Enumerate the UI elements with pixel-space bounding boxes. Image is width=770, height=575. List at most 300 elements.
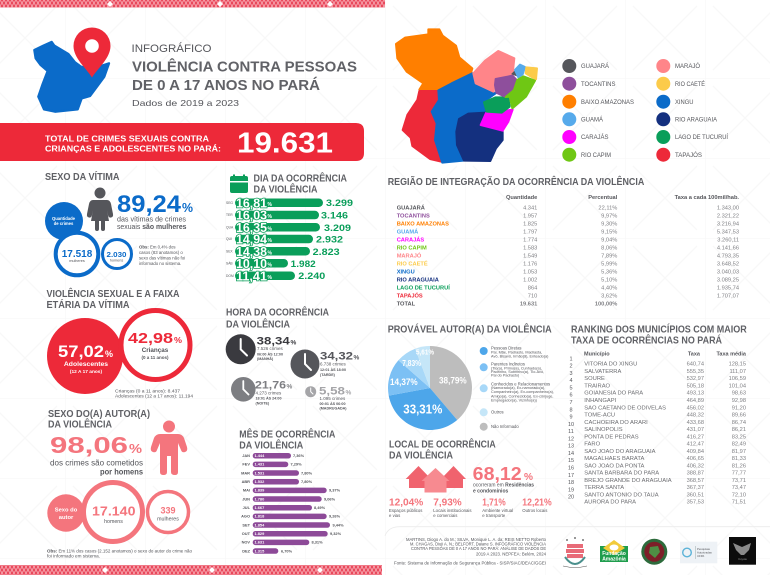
heading: provável autor: PROVÁVEL AUTOR(A) DA VIOLÊNCIA (388, 322, 552, 335)
table: percentual: 5,10% (601, 278, 617, 284)
rank numbers: 16 (568, 466, 574, 472)
table: percentual: 7,89% (601, 254, 617, 260)
table: municípios: FARO (584, 442, 601, 448)
table: taxa: 1.707,07 (717, 294, 739, 300)
table: municípios: SAO CAETANO DE ODIVELAS (584, 405, 666, 411)
map: regiões de integração do Pará (396, 29, 537, 163)
note: observação sobre sexo do autor (47, 549, 193, 559)
rank numbers: 5 (569, 385, 573, 391)
stat: 68,12% (473, 463, 534, 494)
table: quantidade: 864 (528, 286, 537, 292)
table: percentual: 22,11% (598, 205, 617, 211)
legend: regiões: MARAJÓ (675, 63, 700, 70)
table: taxa por município: 368,57 (687, 478, 704, 484)
bar chart: meses: 9,32% (330, 531, 342, 536)
table: taxa por município (687, 362, 704, 506)
bar chart: dias da semana: 10,10 (236, 256, 267, 271)
bar chart: dias da semana: 14,94 (236, 232, 268, 247)
pie chart: autores: 7,83% (402, 359, 421, 368)
table: taxa: 3.216,94 (717, 221, 739, 227)
legend: autores: Pai, Mãe, Padrasto, Madrasta, (491, 351, 542, 355)
table: taxa média por município: 92,98 (732, 398, 746, 404)
table: municípios: TRAIRAO (584, 384, 611, 390)
table: percentual: 9,30% (601, 221, 617, 227)
bar chart: meses: JUL (243, 505, 251, 510)
circle: crianças 42,98%: Crianças (142, 347, 169, 354)
rank numbers: 17 (568, 473, 574, 479)
table: taxa por município: 555,35 (687, 369, 704, 375)
table: taxa por município: 357,53 (687, 500, 704, 506)
bottom decorative band (0, 565, 382, 575)
stat: locais institucionais (433, 497, 472, 518)
legend: regiões: RIO CAETÉ (675, 81, 705, 88)
table: taxa média por município: 98,63 (732, 391, 746, 397)
logo: black square with owl wings: Coyote (738, 557, 747, 561)
bar chart: dias da semana: 2.932 (316, 234, 343, 246)
legend: autores: Parentes Indiretos (491, 362, 525, 367)
circle: quantidade de crimes: Quantidade (52, 216, 76, 221)
bar chart: dias da semana: QUA (226, 226, 234, 230)
stat: ambiente virtual (482, 497, 513, 518)
heading: ranking: RANKING DOS MUNICÍPIOS COM MAIOR (571, 323, 747, 336)
pie chart: autores: 5,61% (416, 349, 435, 356)
circle: quantidade de crimes (45, 202, 83, 240)
rank numbers (568, 356, 574, 501)
table: taxa média por município: 81,33 (732, 456, 746, 462)
heading: sexo da vítima: SEXO DA VÍTIMA (45, 170, 120, 183)
heading: dia da ocorrência: DIA DA OCORRÊNCIA (254, 172, 347, 185)
table: municípios: GOIANESIA DO PARA (584, 391, 643, 397)
table: taxa por município: 406,65 (687, 456, 704, 462)
bar chart: dias da semana: % (268, 275, 272, 281)
table: taxa: 2.321,22 (717, 213, 739, 219)
bar chart: meses: MAR (241, 470, 250, 475)
citation: M. CHAGAS, Diuji A. N.; BELFORT, Daiane S. INFOGRÁFICO VIOLÊNCIA (410, 542, 546, 547)
table: percentual: 9,97% (601, 213, 617, 219)
clock: manhã 38,34%: 38,34 (257, 335, 291, 347)
logo: black square with owl wings (729, 537, 756, 565)
table: municípios: TERRA SANTA (584, 485, 624, 491)
pie chart: autores: 38,79% (439, 375, 467, 385)
legend: regiões: XINGU (675, 99, 694, 106)
clock: noite 21,76%: 18:01 ÀS 24:00 (256, 395, 282, 400)
panel: provável autor(a) (388, 322, 554, 431)
bar chart: meses: 1.444 (254, 453, 265, 458)
rank numbers: 14 (568, 451, 574, 457)
table: taxa por município: 493,13 (687, 391, 704, 397)
circle: 17.140 homens (84, 482, 142, 542)
bar chart: meses: 1.780 (254, 496, 264, 501)
bar chart: meses: FEV (242, 462, 250, 467)
table: percentual: 100,00% (595, 302, 617, 308)
bar chart: dias da semana: 11,41 (236, 268, 267, 283)
citation: MARTINS, Diogo A. do M.; SILVA, Monique L. A. da; REIS NETTO Roberto (406, 537, 547, 542)
bar chart: dias da semana: 16,81 (236, 196, 267, 210)
heading: mês da ocorrência: MÊS DE OCORRÊNCIA (239, 427, 335, 440)
heading: mês da ocorrência (239, 427, 335, 451)
table: taxa média por município: 86,21 (732, 427, 746, 433)
heading: local de ocorrência: LOCAL DE OCORRÊNCIA (389, 438, 496, 451)
circle: 17.140 homens: homens (104, 519, 123, 525)
heading: local de ocorrência: DA VIOLÊNCIA (389, 448, 453, 461)
heading: mês da ocorrência: DA VIOLÊNCIA (239, 438, 303, 451)
table: taxa média por município: 106,59 (729, 376, 746, 382)
icon: calendar (230, 174, 248, 193)
stat: 89,24% (117, 191, 193, 231)
logo: Fundação Amazônia (600, 540, 628, 562)
table: quantidade: 1.002 (523, 278, 537, 284)
table: taxa por município: 431,07 (687, 427, 704, 433)
legend: autores: Pessoas Diretas (491, 346, 522, 351)
table: taxa: 3.040,03 (717, 270, 739, 276)
clock: tarde 34,32% (290, 350, 360, 378)
note: totais por faixa etária: Adolescentes (12 a 17 anos): 11.194 (115, 394, 194, 398)
legend: autores: Padrinho, Sobrinho(a), Tio-Avô, (491, 370, 544, 374)
table: taxa: 3.260,11 (717, 237, 739, 243)
table header: Taxa a cada 100mil/hab. (675, 195, 739, 201)
circle: adolescentes 57,02%: Adolescentes (64, 361, 108, 368)
clock: noite 21,76%: 21,76 (255, 379, 286, 391)
citation: 2019 A 2023. NEPFEA: Belém, 2024 (476, 551, 547, 556)
table: taxa por município: 360,51 (687, 492, 704, 498)
table: municípios: SOURE (584, 376, 605, 382)
bar chart: dias da semana: % (268, 214, 272, 220)
table: quantidade: 1.549 (523, 254, 537, 260)
stat: 98,06%: por homens (100, 468, 144, 476)
circle: crianças 42,98%: 42,98 (128, 331, 173, 347)
bar chart: dias da semana: 3.209 (324, 223, 351, 234)
clock: noite 21,76%: % (286, 383, 292, 390)
stat: 98,06% (50, 432, 144, 476)
legend: regiões: BAIXO AMAZONAS (581, 99, 634, 106)
citation: CONTRA PESSOAS DE 0 A 17 ANOS NO PARÁ: ANÁLISE DE DADOS DE (411, 546, 546, 551)
legend: autores: Pai do Padrasto) (491, 374, 520, 378)
table: taxa média por município: 81,26 (732, 463, 746, 469)
legend: regiões: TOCANTINS (581, 81, 616, 88)
table: taxa por município: 388,87 (687, 471, 704, 477)
table: taxa por município: 505,18 (687, 384, 704, 390)
rank numbers: 8 (569, 407, 573, 413)
bar chart: meses: 1.531 (254, 470, 265, 475)
bar chart: meses: 8,31% (312, 540, 323, 545)
legend: regiões (562, 59, 728, 162)
rank numbers: 18 (568, 480, 574, 486)
bar chart: dias da semana: % (268, 262, 272, 268)
panel: sexo do(a) autor(a) (47, 409, 193, 559)
table: quantidade: 1.797 (523, 229, 537, 235)
table: taxa média por município: 111,07 (729, 369, 746, 375)
legend: regiões: TAPAJÓS (675, 152, 702, 159)
table: nomes das regiões: GUAMÁ (397, 228, 418, 235)
circle: crianças 42,98%: % (174, 336, 182, 345)
rank numbers: 11 (568, 429, 574, 435)
bar chart: meses: 1.315 (254, 548, 265, 553)
table: taxa média por município: 91,20 (732, 405, 746, 411)
heading: hora da ocorrência: DA VIOLÊNCIA (226, 317, 290, 330)
panel: dia da ocorrência (226, 172, 353, 283)
clock: manhã 38,34%: 06:00 ÀS 12:00 (257, 352, 283, 357)
table: taxa média por município: 82,49 (732, 442, 746, 448)
stat: outros locais (522, 497, 552, 513)
table header: ranking: Taxa (688, 351, 701, 357)
table: taxa por município: 448,32 (687, 412, 704, 418)
circle: quantidade de crimes: de crimes (54, 221, 74, 226)
clock: tarde 34,32%: % (354, 354, 360, 361)
table: quantidade: 1.825 (523, 221, 537, 227)
legend: autores: (Tio(a), Primo(a), Cunhado(a), (491, 366, 542, 370)
note: observação sobre sexo da vítima: casos (83 anotamos) o (139, 250, 183, 255)
heading: faixa etária (46, 287, 180, 311)
table: taxa média por município: 71,51 (732, 500, 746, 506)
table: taxa por município: 409,84 (687, 449, 704, 455)
table: nomes das regiões: GUAJARÁ (397, 204, 425, 211)
table: municípios: CACHOEIRA DO ARARI (584, 420, 648, 426)
table: nomes das regiões: TAPAJÓS (397, 292, 423, 300)
bar chart: dias da semana: SEG (226, 201, 233, 205)
circle: adolescentes 57,02%: 57,02 (58, 342, 104, 361)
table: taxa por município: 416,27 (687, 434, 704, 440)
table: municípios: SALVATERRA (584, 369, 621, 375)
table: percentual: 3,62% (601, 294, 617, 300)
rank numbers: 2 (569, 364, 573, 370)
heading: dia da ocorrência (254, 172, 347, 196)
legend: autores (480, 346, 554, 431)
rank numbers: 13 (568, 444, 574, 450)
heading: sexo do autor (48, 409, 150, 430)
table: municípios: SAO JOAO DA PONTA (584, 463, 645, 469)
bar chart: dias da semana (226, 196, 353, 283)
table: taxa média por município: 128,15 (729, 362, 746, 368)
table: municípios: SANTO ANTONIO DO TAUA (584, 492, 659, 498)
bar chart: meses: AGO (241, 514, 250, 519)
circle: 17.140 homens: 17.140 (92, 504, 136, 518)
heading: hora da ocorrência (226, 306, 329, 330)
note: observação sobre sexo do autor: foi informado em sistema. (47, 554, 100, 559)
table: quantidade (520, 205, 537, 308)
table: quantidade: 1.053 (523, 270, 537, 276)
clock: madrugada 5,58%: 1.095 crimes (320, 396, 346, 401)
table: municípios: SALINOPOLIS (584, 427, 623, 433)
stat: outros locais: 12,21% (522, 497, 552, 508)
title block: INFOGRÁFICO (132, 42, 212, 55)
panel: mês da ocorrência (239, 427, 344, 554)
rank numbers: 4 (569, 378, 573, 384)
table header (506, 195, 739, 201)
table: municípios: MAGALHAES BARATA (584, 456, 644, 462)
stat: 89,24%: % (182, 200, 193, 215)
table: taxa: 5.347,53 (717, 229, 739, 235)
banner: total de crimes sexuais (0, 123, 364, 161)
citation (394, 537, 547, 565)
stat: ambiente virtual: 1,71% (482, 497, 506, 508)
bar chart: dias da semana: SÁB (226, 262, 233, 266)
logo: circular seal (641, 539, 667, 565)
table: percentual: 8,06% (601, 246, 617, 252)
logo: Fundação Amazônia: Amazônia (602, 556, 626, 562)
note: observação sobre sexo da vítima: Obs: Em 0,4% dos (139, 244, 176, 250)
panel: hora da ocorrência (226, 306, 360, 410)
bar chart: meses: DEZ (242, 548, 251, 553)
bar chart: meses: 7,80% (301, 470, 313, 475)
bar chart: meses: 1.818 (254, 514, 265, 519)
rank numbers: 3 (569, 371, 573, 377)
title block: DE 0 A 17 ANOS NO PARÁ (132, 77, 320, 94)
stat: 68,12%: ocorreram em Residências (473, 483, 534, 489)
stat: 98,06%: % (129, 441, 142, 456)
stat: 89,24%: sexuais são mulheres (117, 222, 186, 231)
legend: autores: Não Informado (491, 424, 519, 429)
bar chart: meses (241, 453, 344, 554)
stat: locais institucionais: 7,93% (433, 497, 462, 508)
table: quantidade: 1.176 (523, 262, 537, 268)
bar chart: meses: MAI (243, 488, 250, 493)
pie chart: autores: 33,31% (403, 402, 443, 417)
bar chart: meses: 1.829 (254, 531, 265, 536)
circle: 2.030 homens: homens (110, 258, 123, 262)
bar chart: meses: 9,06% (324, 496, 336, 501)
legend: autores: Conhecidos e Relacionamentos (491, 381, 550, 386)
circle: 339 mulheres: mulheres (157, 516, 179, 522)
table header: ranking: Taxa média (716, 351, 747, 357)
table: quantidade: 19.631 (520, 302, 537, 308)
table: nomes das regiões: RIO ARAGUAIA (397, 278, 439, 284)
circle: 2.030 homens: 2.030 (106, 250, 126, 259)
circle: sexo do autor (47, 494, 85, 532)
bar chart: dias da semana: QUI (226, 237, 232, 241)
bar chart: meses: NOV (242, 540, 250, 545)
table: nomes das regiões (397, 204, 450, 308)
panel: sexo da vítima (45, 170, 193, 275)
table: taxa por município: 532,97 (687, 376, 704, 382)
icon: female figure (87, 188, 113, 231)
stat: ambiente virtual: Ambiente virtual (482, 508, 513, 513)
bar chart: meses: 7,36% (293, 453, 305, 458)
table: nomes das regiões: XINGU (397, 270, 415, 276)
bar chart: meses: 6,70% (281, 548, 293, 553)
bar chart: dias da semana: DOM (226, 274, 234, 278)
heading: sexo do autor: DA VIOLÊNCIA (48, 418, 112, 430)
bar chart: dias da semana: SEX (226, 250, 233, 254)
clock: manhã 38,34% (226, 334, 296, 364)
rank numbers: 19 (568, 487, 574, 493)
bar chart: meses: 9,37% (329, 488, 341, 493)
table: municípios: INHANGAPI (584, 398, 617, 404)
table header: Percentual (588, 195, 618, 201)
heading: ranking (571, 323, 747, 347)
legend: autores: Outros (491, 410, 504, 414)
legend: regiões: CARAJÁS (581, 134, 608, 141)
table: taxa: 3.089,25 (717, 278, 739, 284)
table: taxa média por município: 89,66 (732, 412, 746, 418)
icon: houses (406, 466, 466, 492)
bar chart: dias da semana: % (268, 202, 272, 208)
table: taxa por município: 456,02 (687, 405, 704, 411)
legend: autores: Avô, Bisavô, Irmão(ã), Enteado(a) (491, 354, 549, 358)
legend: regiões: RIO CAPIM (581, 152, 611, 159)
bar chart: meses: OUT (242, 531, 251, 536)
logo: Pesquisas Autorizadas: Pesquisas (697, 547, 711, 551)
stat: locais institucionais: e comerciais (433, 513, 457, 518)
bar chart: meses: 7,29% (290, 462, 302, 467)
panel: região de integração (388, 175, 739, 308)
bar chart: dias da semana: 2.240 (298, 271, 325, 282)
bar chart: meses: JAN (242, 453, 250, 458)
table: quantidade: 1.957 (523, 213, 537, 219)
table header: ranking: Município (584, 351, 610, 357)
clock: madrugada 5,58%: (MADRUGADA) (320, 406, 347, 410)
bar chart: dias da semana: 1.982 (291, 259, 316, 270)
table: nomes das regiões: RIO CAETÉ (397, 260, 428, 268)
rank numbers: 10 (568, 422, 574, 428)
heading: local de ocorrência (389, 438, 496, 461)
table: taxa média por município: 83,25 (732, 434, 746, 440)
bar chart: dias da semana: 16,03 (236, 208, 267, 223)
table: percentual: 9,04% (601, 237, 617, 243)
table: nomes das regiões: MARAJÓ (397, 252, 422, 260)
table: municípios: BREJO GRANDE DO ARAGUAIA (584, 478, 672, 484)
table: nomes das regiões: TOCANTINS (397, 213, 430, 219)
table: taxa (717, 205, 739, 300)
table: percentual (595, 205, 617, 308)
banner: total de crimes sexuais: 19.631 (237, 128, 333, 160)
bar chart: meses: SET (242, 522, 251, 527)
rank numbers: 1 (569, 356, 573, 362)
clock: manhã 38,34%: 7.526 crimes (257, 346, 284, 351)
bar chart: meses: 1.532 (254, 479, 265, 484)
clock: madrugada 5,58%: 5,58 (319, 385, 345, 397)
title block (132, 42, 357, 108)
table: municípios (584, 362, 672, 506)
note: totais por faixa etária (115, 388, 194, 398)
circle: 339 mulheres: 339 (160, 506, 176, 516)
top decorative band (0, 0, 385, 8)
clock: manhã 38,34%: % (290, 339, 296, 346)
table: taxa média por município: 77,77 (732, 471, 746, 477)
table: municípios: VITORIA DO XINGU (584, 362, 637, 368)
stat: 68,12%: % (524, 472, 533, 483)
heading: hora da ocorrência: HORA DA OCORRÊNCIA (226, 306, 329, 319)
circle: adolescentes 57,02%: (12 A 17 anos) (70, 369, 102, 375)
logo: Pesquisas Autorizadas (680, 542, 717, 563)
title block: Dados de 2019 a 2023 (132, 98, 239, 108)
table: nomes das regiões: RIO CAPIM (397, 246, 427, 252)
heading: faixa etária: ETÁRIA DA VÍTIMA (46, 298, 130, 311)
logo: Fundação Amazônia: Fundação (602, 551, 626, 557)
rank numbers: 12 (568, 436, 574, 442)
bar chart: meses: 1.667 (254, 505, 264, 510)
rank numbers: 6 (569, 393, 573, 399)
bar chart: meses: 9,44% (332, 522, 344, 527)
legend: autores: Companheiro(a), Ex-companheiro(a), (491, 390, 554, 394)
bar chart: meses: 1.431 (254, 462, 265, 467)
panel: violência sexual e faixa etária (46, 287, 194, 398)
bar chart: meses: JUN (242, 496, 250, 501)
bar chart: dias da semana: % (268, 250, 272, 256)
table: taxa por município: 640,74 (687, 362, 704, 368)
table header: ranking (584, 351, 747, 357)
stat: locais institucionais: Locais institucionais (433, 508, 472, 513)
logo: Pesquisas Autorizadas: UFPA (697, 554, 704, 558)
stat: outros locais: Outros locais (522, 508, 547, 513)
stat: espaços públicos: e vias (389, 513, 400, 518)
banner: total de crimes sexuais: TOTAL DE CRIMES SEXUAIS CONTRA (45, 134, 209, 144)
stat: 68,12%: 68,12 (473, 463, 522, 484)
stat: 98,06%: 98,06 (50, 432, 128, 458)
icon: male figure (151, 420, 187, 475)
note: observação sobre sexo da vítima (139, 244, 185, 266)
table: taxa média por município: 81,97 (732, 449, 746, 455)
pie chart: autores (388, 346, 472, 430)
